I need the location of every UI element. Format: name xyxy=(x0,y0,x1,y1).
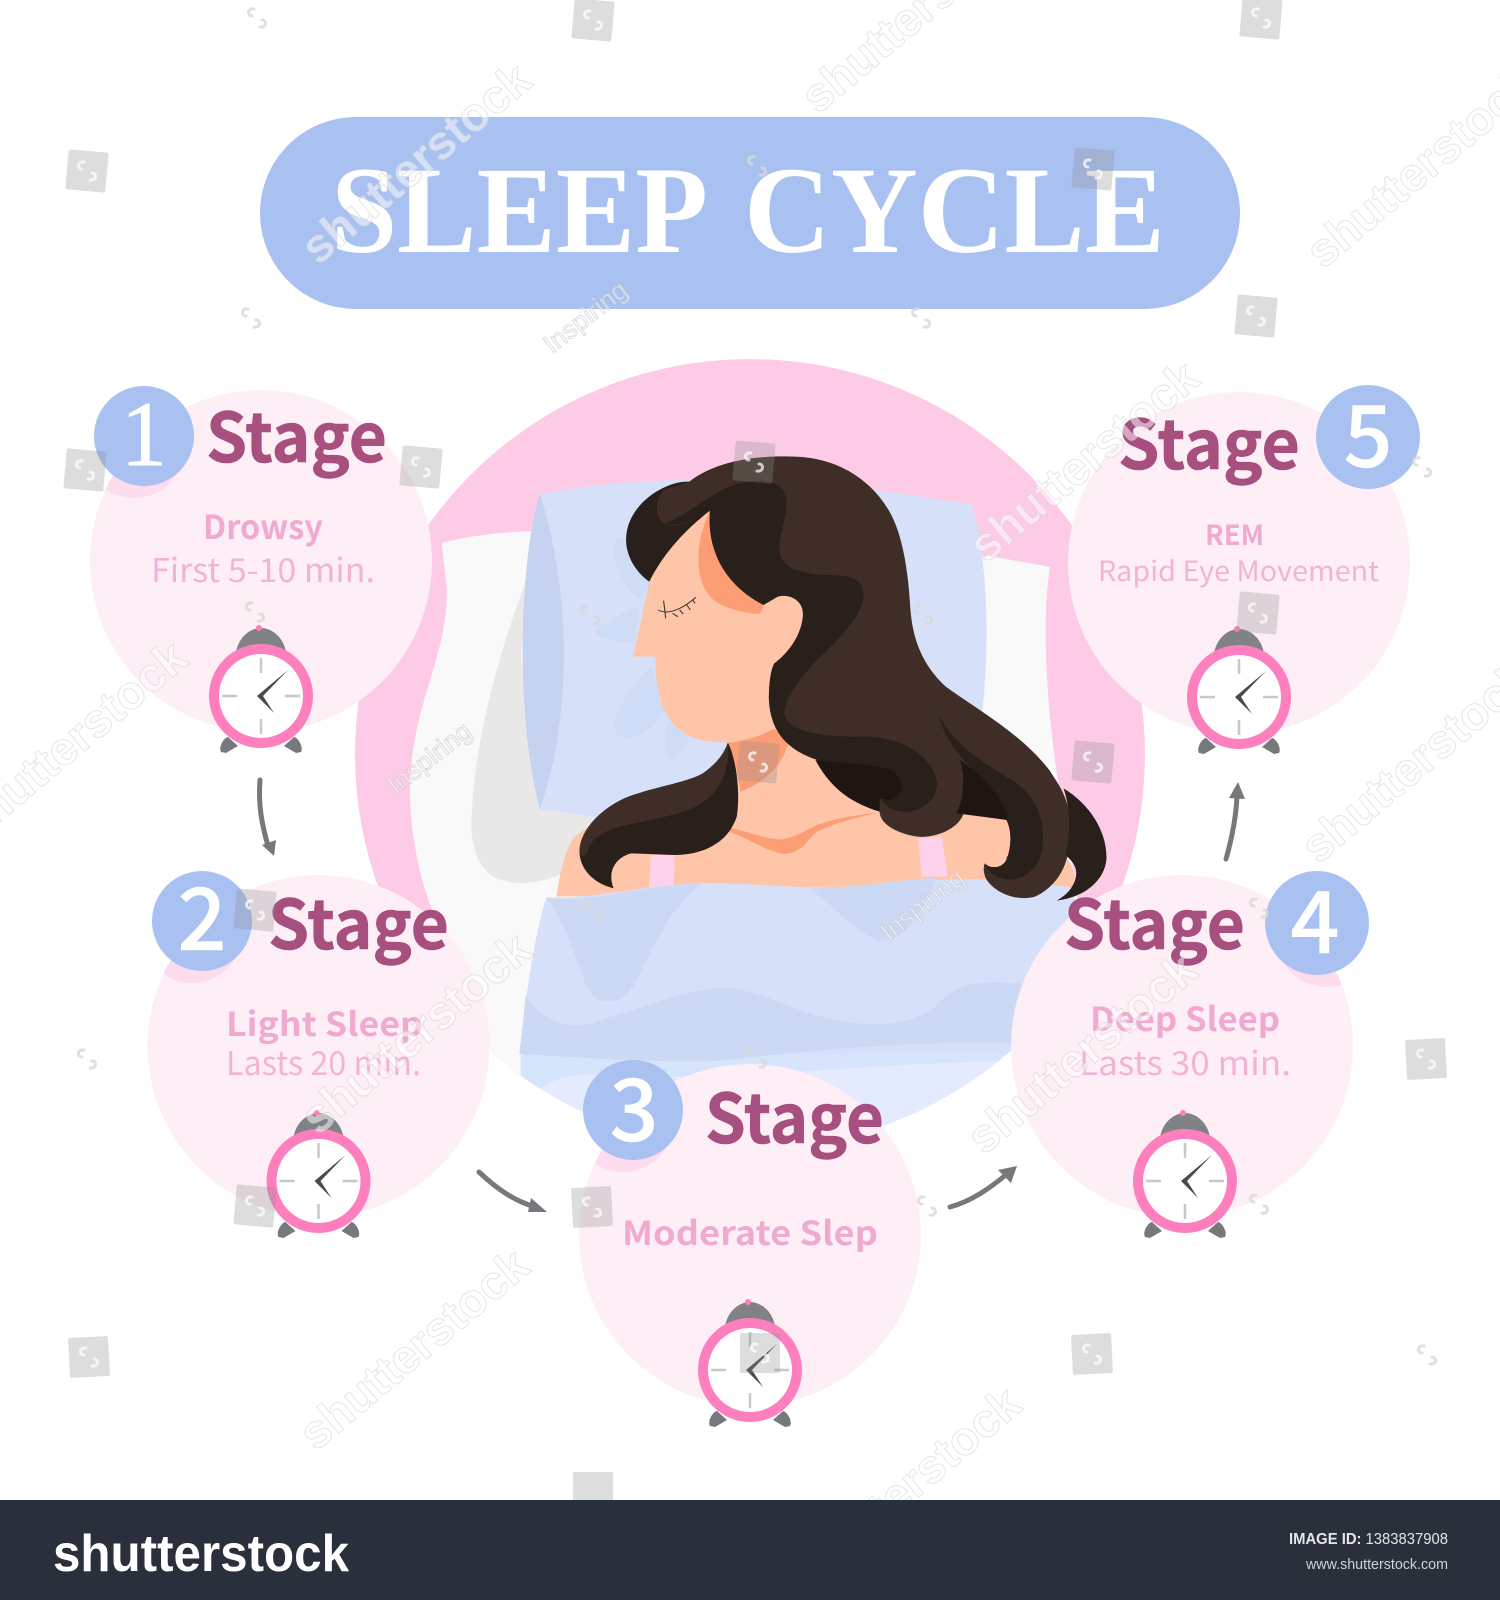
watermark layer: shutterstock xyxy=(780,1375,1031,1598)
woman xyxy=(556,456,1106,901)
blanket xyxy=(519,878,1074,1126)
stage 1 panel xyxy=(83,383,432,753)
stage 2 background circle xyxy=(148,875,490,1217)
arrow: stage 2 to 3 xyxy=(479,1172,547,1212)
footer logo: shutterstock xyxy=(53,1525,349,1583)
hair dark layers xyxy=(664,481,937,812)
title banner xyxy=(260,117,1240,309)
hair front bump xyxy=(626,482,710,582)
stage 5 number badge xyxy=(1316,367,1420,492)
stage 3 number badge xyxy=(583,1060,683,1172)
left hair strand xyxy=(579,743,738,888)
stage 3 heading: Stage xyxy=(705,1064,884,1163)
stage 2 panel xyxy=(141,850,490,1238)
stage 4 description xyxy=(1079,993,1291,1085)
stage 1 background circle xyxy=(90,390,432,732)
ear xyxy=(764,596,803,663)
skin shadows xyxy=(698,511,880,854)
illustration: woman sleeping in bed xyxy=(355,359,1145,1166)
stage 3 clock icon xyxy=(703,1299,797,1427)
hair falling over blanket xyxy=(984,856,1106,901)
stage 2 clock icon xyxy=(272,1110,366,1238)
straps xyxy=(649,837,947,892)
stage 1 description: Drowsy xyxy=(203,501,323,549)
arrow: stage 3 to 4 xyxy=(950,1166,1017,1207)
watermark layer: shutterstock xyxy=(288,1237,539,1460)
watermark layer: Inspiring xyxy=(874,863,970,947)
title banner: SLEEP xyxy=(331,142,708,279)
stage 4 panel xyxy=(1011,853,1379,1238)
stage 1 number badge xyxy=(94,386,194,498)
pink backdrop circle xyxy=(355,359,1145,922)
title banner: CYCLE xyxy=(744,142,1165,279)
stage 3 number badge: 3 xyxy=(609,1041,659,1166)
image id: IMAGE ID: 1383837908 xyxy=(1289,1531,1448,1548)
footer bar xyxy=(0,1500,1500,1600)
website: www.shutterstock.com xyxy=(1305,1556,1448,1573)
stage 3 panel xyxy=(572,1041,921,1427)
stage 5 number badge: 5 xyxy=(1343,367,1393,492)
stage 4 description: Lasts 30 min. xyxy=(1079,1037,1291,1085)
stage 4 clock icon xyxy=(1138,1110,1232,1238)
stage 5 heading: Stage xyxy=(1118,390,1300,489)
skin xyxy=(556,511,1075,897)
watermark layer: shutterstock xyxy=(290,921,541,1144)
stage 4 number badge xyxy=(1265,871,1369,987)
watermark layer: shutterstock xyxy=(290,51,541,274)
closed eye xyxy=(658,597,696,618)
stage 2 number badge xyxy=(152,871,252,983)
stage 3 description: Moderate Slep xyxy=(622,1207,878,1255)
stage 5 description: Rapid Eye Movement xyxy=(1098,550,1379,590)
stage 2 heading: Stage xyxy=(268,870,449,969)
stage 2 description xyxy=(226,998,423,1085)
stage 1 description: First 5-10 min. xyxy=(151,544,375,592)
stage 4 heading: Stage xyxy=(1064,870,1245,969)
stage 2 number badge: 2 xyxy=(177,850,227,975)
stage 5 clock icon xyxy=(1192,626,1286,754)
stage 2 description: Light Sleep xyxy=(226,998,423,1046)
stage 3 background circle xyxy=(579,1064,921,1406)
watermark layer: shutterstock xyxy=(956,941,1207,1164)
watermark layer: Inspiring xyxy=(537,275,633,359)
stage 1 description xyxy=(151,501,375,592)
stage 5 background circle xyxy=(1068,392,1410,734)
stage 1 number badge: 1 xyxy=(121,383,167,485)
stage 1 heading: Stage xyxy=(206,383,387,482)
stage 2 description: Lasts 20 min. xyxy=(226,1037,421,1085)
stage 4 number badge: 4 xyxy=(1290,853,1340,978)
stage 5 description: REM xyxy=(1205,514,1264,554)
stage 1 clock icon xyxy=(214,625,308,753)
pillow xyxy=(471,480,987,883)
arrow: stage 1 to 2 xyxy=(259,780,276,856)
hair main xyxy=(657,456,1071,898)
stage 5 panel xyxy=(1068,367,1420,754)
watermark layer: Inspiring xyxy=(381,716,477,800)
watermark layer: shutterstock xyxy=(958,349,1209,572)
stage 4 background circle xyxy=(1011,875,1353,1217)
bed sheet xyxy=(410,531,1077,1076)
arrow: stage 4 to 5 xyxy=(1226,782,1245,859)
stage 4 description: Deep Sleep xyxy=(1090,993,1280,1041)
stage 5 description xyxy=(1098,514,1379,590)
